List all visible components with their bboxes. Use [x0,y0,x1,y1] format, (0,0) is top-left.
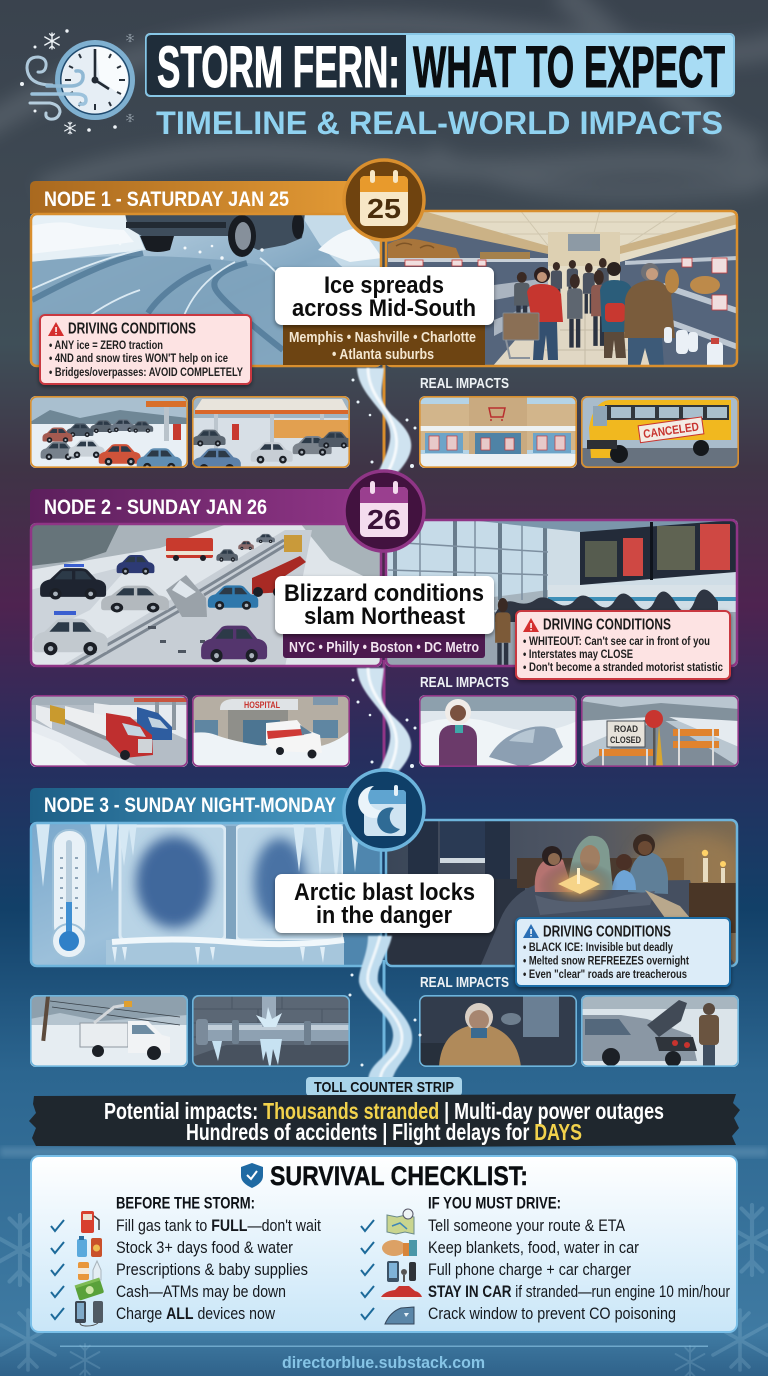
caption and cities: across Mid-South [292,295,476,322]
thumbnail: utility truck [30,995,188,1067]
timeline spine [382,360,386,1082]
date badge 26 [344,471,424,551]
if you must drive column: IF YOU MUST DRIVE: [428,1194,561,1212]
if you must drive column [361,1194,730,1324]
driving conditions callout: • WHITEOUT: Can't see car in front of you [523,634,710,648]
thumbnail: canceled school bus [581,396,739,468]
thumbnail: ambulance at hospital: HOSPITAL [244,700,280,710]
thumbnail: road closed barricades: CLOSED [610,735,641,745]
icon: phone and charger [387,1261,416,1282]
caption: in the danger [316,902,452,929]
caption and cities: slam Northeast [304,603,465,630]
panel: node 2 Sunday [30,471,739,767]
before the storm column: Charge ALL devices now [116,1304,276,1323]
icy ribbon lower [348,936,422,1080]
date badge 25 [344,160,424,240]
if you must drive column: Full phone charge + car charger [428,1260,631,1279]
node 3 header: NODE 3 - SUNDAY NIGHT-MONDAY [44,794,336,817]
date badge moon [344,770,424,850]
shopper with blue jacket [600,262,632,358]
real impacts label: REAL IMPACTS [420,375,509,392]
before the storm column: Cash—ATMs may be down [116,1282,286,1301]
driving conditions callout: • ANY ice = ZERO traction [49,338,163,352]
driving conditions callout [40,315,251,384]
toll counter label: TOLL COUNTER STRIP [314,1079,454,1096]
date badge 26: 26 [367,504,401,535]
icon: cash [75,1277,104,1301]
scene: family huddled in bed by candlelight [385,819,745,967]
toll counter strip: Potential impacts: Thousands stranded | Multi-day power outages [104,1098,664,1124]
driving conditions callout: • 4ND and snow tires WON'T help on ice [49,351,228,365]
driving conditions callout: • Melted snow REFREEZES overnight [523,954,689,968]
before the storm column [51,1194,321,1326]
thumbnail: ambulance at hospital [192,695,350,767]
if you must drive column: Tell someone your route & ETA [428,1216,626,1235]
driving conditions callout: DRIVING CONDITIONS [68,320,196,338]
icon: red car in snow [380,1286,422,1300]
thumbnail: frozen burst pipe [192,995,350,1071]
if you must drive column: Crack window to prevent CO poisoning [428,1304,676,1323]
thumbnail: road closed barricades [581,695,739,767]
caption and cities: Blizzard conditions [284,580,484,607]
driving conditions callout [516,611,730,679]
scene: airport departure board [385,519,738,672]
shopping cart [503,313,539,358]
thumbnail: canceled school bus: CANCELED [642,419,700,441]
check marks [361,1220,374,1319]
panel: node 1 Saturday [30,160,739,473]
node 1 header [30,181,360,214]
check marks [51,1220,64,1319]
panel: survival checklist [31,1156,737,1332]
scene: icy road with sliding car [30,213,382,367]
before the storm column: BEFORE THE STORM: [116,1194,255,1212]
thumbnail: stranded trucks [30,695,188,767]
caption and cities: • Atlanta suburbs [332,347,434,363]
caption and cities: Ice spreads [324,272,444,299]
thumbnail: crowded gas pumps [192,396,352,473]
thumbnail: grocery storefront [419,396,577,468]
date badge 25: 25 [367,193,401,224]
node 1 header: NODE 1 - SATURDAY JAN 25 [44,188,289,211]
icon: phone and battery [75,1301,103,1326]
real impacts label: REAL IMPACTS [420,674,509,691]
toll counter strip [29,1094,740,1147]
icy ribbon middle [352,668,416,772]
before the storm column: Prescriptions & baby supplies [116,1260,308,1279]
icon: map [387,1209,414,1234]
icy ribbon upper [352,368,416,472]
driving conditions callout: • Don't become a stranded motorist statistic [523,660,723,674]
toll counter strip: Hundreds of accidents | Flight delays for DAYS [186,1119,582,1145]
driving conditions callout: • Even "clear" roads are treacherous [523,967,687,981]
wind swirls [27,57,86,119]
node 3 header [30,788,360,823]
thumbnail: road closed barricades: ROAD [614,724,638,734]
title banner: STORM FERN: [157,35,400,100]
scene: highway pileup [30,523,382,667]
driving conditions callout: DRIVING CONDITIONS [543,924,671,940]
footer source: directorblue.substack.com [282,1353,485,1372]
icon: medicine and bottle [78,1261,101,1280]
real impacts label: REAL IMPACTS [420,974,509,991]
shopper in red jacket [527,267,563,360]
footer divider [60,1346,708,1347]
icon: cracked window [385,1307,414,1324]
shopper in brown coat [624,263,679,367]
icon: water and food [77,1236,102,1257]
thumbnail: gas station line [30,396,188,471]
caption and cities [275,576,494,658]
caption [275,874,494,933]
icon: gas pump [81,1211,99,1233]
subtitle: TIMELINE & REAL-WORLD IMPACTS [156,105,723,141]
thumbnail: elderly man in blanket [419,995,577,1067]
caption and cities: NYC • Philly • Boston • DC Metro [289,640,479,656]
driving conditions callout: DRIVING CONDITIONS [543,616,671,634]
thumbnail: woman beside buried car [419,695,577,767]
title banner [145,33,735,100]
node 2 header [30,489,360,524]
thumbnail: car with open hood [581,995,739,1067]
driving conditions callout: • Bridges/overpasses: AVOID COMPLETELY [49,365,243,379]
driving conditions callout: • Interstates may CLOSE [523,647,633,661]
panel: node 3 Sunday night to Monday [30,770,745,1071]
node 2 header: NODE 2 - SUNDAY JAN 26 [44,496,267,519]
caption and cities [275,267,494,365]
driving conditions callout: • BLACK ICE: Invisible but deadly [523,940,673,954]
before the storm column: Fill gas tank to FULL—don't wait [116,1216,321,1235]
driving conditions callout [516,918,730,986]
scene: panic shoppers in store [385,210,738,370]
icon: storm clock [20,29,135,134]
icon: blanket and food [382,1240,417,1256]
if you must drive column: Keep blankets, food, water in car [428,1238,639,1257]
caption and cities: Memphis • Nashville • Charlotte [289,330,476,346]
caption: Arctic blast locks [294,879,475,906]
checklist heading with shield: SURVIVAL CHECKLIST: [270,1161,528,1191]
scene: frosted window and thermometer [30,822,383,967]
before the storm column: Stock 3+ days food & water [116,1238,293,1257]
